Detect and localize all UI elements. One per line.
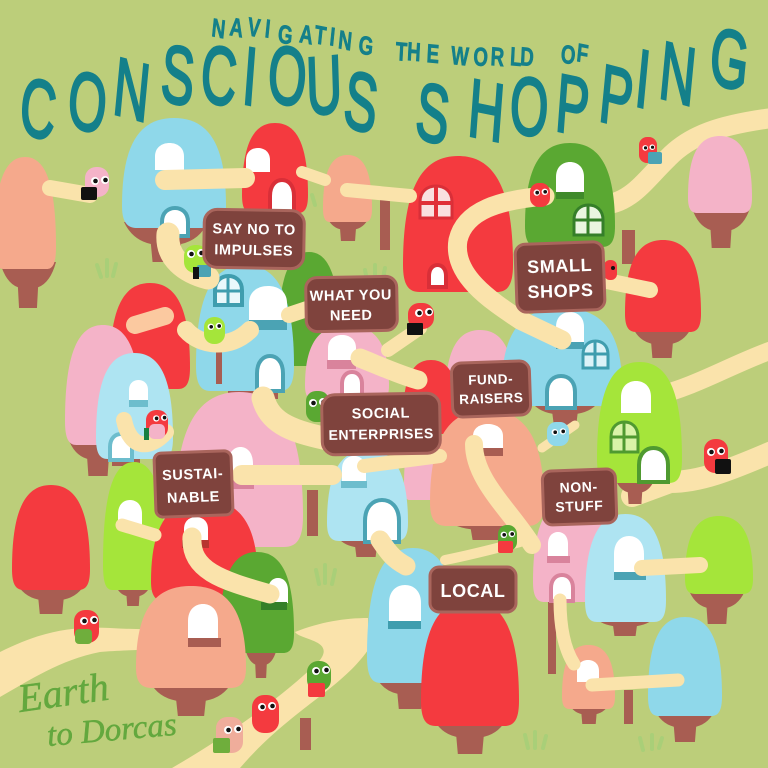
winding paths between houses <box>50 172 700 685</box>
character: green <box>306 391 329 422</box>
character: red bottom <box>252 695 279 733</box>
stem bottom <box>300 718 311 750</box>
title: navigating the world of: NAVIGATING THE WORLD OF <box>210 11 590 72</box>
character: lime plain <box>204 317 225 344</box>
house: red bottom centre <box>421 600 519 754</box>
sign: social enterprises: SOCIAL <box>351 405 410 423</box>
sign: non-stuff <box>542 469 617 525</box>
character: red behind sign <box>604 260 617 280</box>
house: green top <box>525 143 635 264</box>
house: red lower left <box>151 500 258 602</box>
road: bottom left <box>0 628 195 697</box>
sign: local <box>430 567 516 612</box>
character: green with red bag right <box>307 661 331 697</box>
house: blue bottom right <box>624 617 722 742</box>
sign: small shops: SHOPS <box>527 280 594 302</box>
house: green lower <box>220 552 294 678</box>
house: lime right <box>597 362 682 504</box>
house: pink lower right <box>533 500 611 674</box>
house: salmon centre <box>430 410 544 540</box>
road: right lower <box>632 452 768 496</box>
road: right upper <box>650 350 768 398</box>
house: red top <box>242 123 308 213</box>
house: salmon small bottom <box>562 645 615 724</box>
sign: fund-raisers: FUND- <box>468 371 513 388</box>
sign: say no to impulses <box>204 209 304 269</box>
road: top right <box>600 118 768 205</box>
sign: say no to impulses: SAY NO TO <box>212 221 296 239</box>
sign: what you need: WHAT YOU <box>310 287 392 305</box>
sign: small shops <box>515 241 605 313</box>
sign: social enterprises: ENTERPRISES <box>328 425 434 443</box>
house: light blue lower right <box>585 514 666 636</box>
character: red with black bag <box>407 303 434 335</box>
house: pink small centre <box>404 428 442 500</box>
stem <box>380 200 390 250</box>
sign: fund-raisers: RAISERS <box>459 390 524 407</box>
sign: local: LOCAL <box>440 581 506 601</box>
character: red with blue bag <box>639 137 662 164</box>
house: light blue left <box>96 353 173 466</box>
character: pink with black bag <box>81 167 109 200</box>
character: red with pink bag <box>144 410 168 440</box>
character: lime with blue bag <box>184 245 211 279</box>
sign: sustainable: NABLE <box>167 489 220 507</box>
house: red mid centre <box>403 360 459 434</box>
signature: earth to dorcas: to Dorcas <box>46 707 178 754</box>
signature: earth to dorcas <box>14 664 178 754</box>
house: blue top <box>122 118 226 262</box>
sign: say no to impulses: IMPULSES <box>214 242 293 260</box>
house: red left <box>110 283 190 389</box>
character: red top <box>530 183 550 207</box>
house: green behind blue <box>278 252 340 366</box>
character: red with black bag right <box>704 439 731 474</box>
character: green with red bag <box>498 525 517 553</box>
house: lime left <box>103 462 165 606</box>
grass tufts <box>97 195 662 750</box>
house: pink big left <box>175 392 318 547</box>
sign: what you need: NEED <box>330 308 373 324</box>
house: lime far right <box>685 516 753 624</box>
house: big red with window <box>403 156 513 292</box>
sign: what you need <box>306 276 397 332</box>
sign: social enterprises <box>321 393 441 455</box>
house: blue bottom centre <box>367 548 459 709</box>
sign: non-stuff: NON- <box>559 478 598 496</box>
character: blue <box>547 422 569 446</box>
character: pink with green bag <box>213 717 243 753</box>
house: light blue centre <box>327 450 408 557</box>
house: blue centre left <box>196 265 294 399</box>
sign: non-stuff: STUFF <box>555 497 604 515</box>
sign: sustainable <box>154 451 233 517</box>
character: red with green bag <box>74 610 99 644</box>
house: pink left <box>65 325 141 476</box>
house: red bottom left <box>12 485 90 614</box>
sign: fund-raisers <box>451 361 531 417</box>
sign: sustainable: SUSTAI- <box>162 466 224 484</box>
house: pink centre <box>305 325 389 401</box>
signature: earth to dorcas: Earth <box>14 664 111 721</box>
road: bottom centre <box>172 618 368 768</box>
house: salmon far left <box>0 157 56 308</box>
house: red right <box>625 240 701 358</box>
house: salmon lower <box>136 586 246 716</box>
house: pink back centre <box>445 330 515 420</box>
sign: small shops: SMALL <box>527 255 592 277</box>
house: blue right centre <box>502 308 622 425</box>
title: conscious shopping: CONSCIOUS SHOPPING <box>16 10 753 164</box>
house: salmon small top <box>323 155 372 241</box>
house: pink top right <box>688 136 752 248</box>
